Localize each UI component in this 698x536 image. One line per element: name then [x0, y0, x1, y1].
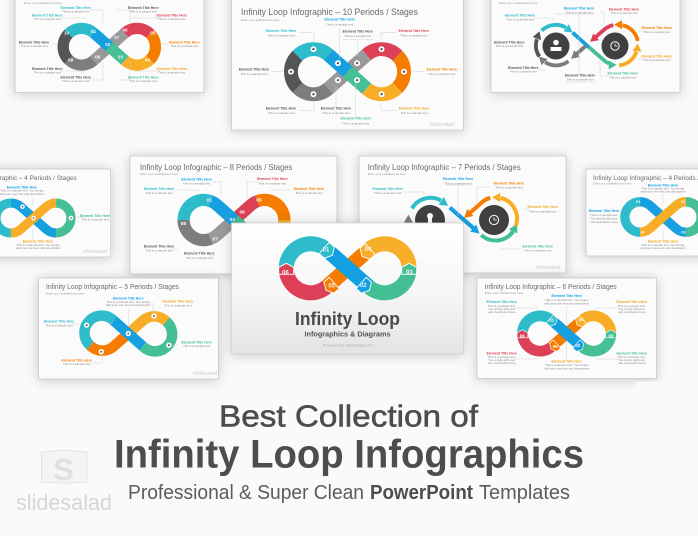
logo: slidesalad: slidesalad	[16, 490, 112, 515]
element labels: This is a sample text.	[618, 355, 646, 359]
icon: person badge	[415, 205, 445, 235]
infinity loop: 10 numbered segments: 07	[114, 35, 120, 40]
element labels: This is a sample text	[186, 256, 213, 260]
element labels: This is a sample text	[240, 72, 268, 76]
infinity loop: 8 segments	[181, 198, 284, 243]
slide subtitle: Enter your subtitled text here	[241, 18, 280, 22]
element labels: add your own text and description	[106, 303, 151, 307]
element labels	[144, 177, 324, 260]
element labels: Element Title Here	[128, 6, 159, 10]
element labels: Element Title Here	[565, 74, 595, 78]
element labels	[0, 186, 110, 250]
infinity loop: 10 numbered segments	[63, 28, 156, 65]
heading: infinity loop infographics: Infinity Loop Infographics	[114, 432, 584, 476]
badge 03: 03	[406, 270, 413, 276]
element labels: Element Title Here	[551, 294, 582, 298]
element labels: Element Title Here	[616, 351, 647, 355]
main slide heading: Infinity Loop	[295, 309, 400, 329]
panel: main cover slide	[232, 223, 464, 354]
element labels: You simply add your	[488, 358, 515, 362]
element labels: Element Title Here	[443, 177, 473, 181]
panel: 6 periods slide	[477, 278, 656, 378]
infinity loop: 10 numbered segments: 05	[150, 31, 156, 36]
element labels: Element Title Here	[181, 178, 212, 182]
slide title: Infinity Loop Infographic – 5 Periods / Stages	[46, 284, 179, 291]
subheading: Professional & Super Clean	[128, 482, 364, 504]
infinity loop: 6 numbered segments: 01	[549, 318, 555, 323]
element labels: This is a sample text	[565, 10, 593, 14]
element labels: Element Title Here	[144, 187, 174, 191]
element labels: This is a sample text	[164, 303, 192, 307]
element labels: This is a sample text	[374, 191, 402, 195]
element labels: This is a sample text	[428, 72, 456, 76]
element labels: Element Title Here	[564, 7, 594, 11]
element labels: This is a sample text. You simply	[107, 300, 150, 304]
element labels	[239, 18, 457, 125]
element labels: own description here	[488, 361, 516, 365]
subheading: PowerPoint	[370, 482, 473, 504]
element labels: Element Title Here	[551, 360, 582, 364]
element labels	[19, 6, 200, 83]
element labels	[372, 177, 558, 253]
element labels: Element Title Here	[641, 54, 672, 58]
element labels: This is a sample text	[171, 44, 198, 48]
element labels: This is a sample text	[524, 249, 552, 253]
element labels: own description here	[618, 361, 646, 365]
infinity loop: 8 segments: 05	[256, 198, 262, 204]
element labels: This is a sample text	[529, 210, 557, 214]
element labels: Element Title Here	[19, 40, 49, 44]
element labels: This is a sample text.	[488, 355, 516, 359]
element labels: This is a sample text. You simply	[16, 243, 60, 247]
element labels: Element Title Here	[648, 240, 678, 244]
element labels: This is a sample text	[643, 58, 671, 62]
element labels: This is a sample text	[610, 11, 638, 15]
infinity loop: 4 numbered segments	[625, 200, 698, 235]
element labels: Element Title Here	[342, 30, 373, 34]
watermark: slidesalad	[430, 122, 454, 128]
infinity loop: 10 numbered segments: 09	[68, 58, 74, 63]
slide subtitle: Enter your subtitled text here	[46, 291, 85, 295]
element labels: Element Title Here	[163, 300, 193, 304]
logo: slidesalad	[16, 450, 112, 515]
element labels: Element Title Here	[607, 72, 638, 76]
element labels: This is a sample text	[510, 70, 537, 74]
infinity loop: 4 numbered segments: 01	[636, 200, 640, 204]
logo: slidesalad: S	[53, 452, 74, 487]
slide title: Infinity Loop Infographic – 6 Periods / Stages	[485, 284, 617, 291]
element labels: You simply add your	[618, 307, 645, 311]
element labels: This is a sample text	[344, 34, 372, 38]
infinity loop: 8 segments: 06	[239, 209, 245, 215]
infinity loop: 10 numbered segments: 06	[123, 28, 128, 33]
element labels: Element Title Here	[60, 75, 91, 79]
element labels: Element Title Here	[169, 40, 200, 44]
element labels: This is a sample text	[62, 9, 90, 13]
element labels: This is a sample text	[34, 71, 61, 75]
element labels: Element Title Here	[61, 358, 92, 362]
infinity loop: 8 segments: 01	[207, 198, 212, 204]
element labels: This is a sample text	[496, 44, 523, 48]
infinity loop: 6 numbered segments: 06	[520, 334, 525, 339]
element labels: Element Title Here	[399, 106, 429, 110]
element labels: This is a sample text	[34, 17, 61, 21]
element labels: Element Title Here	[321, 106, 351, 110]
element labels: This is a sample text. You simply	[545, 298, 589, 302]
element labels: Element Title Here	[156, 13, 187, 17]
element labels: add your own text and description	[0, 192, 45, 196]
element labels: This is a sample text	[63, 362, 91, 366]
element labels: You simply add your	[618, 358, 645, 362]
element labels: Element Title Here	[508, 66, 539, 70]
element labels	[589, 184, 686, 250]
element labels: Element Title Here	[266, 29, 296, 33]
slide subtitle: Enter your subtitled text here	[140, 172, 179, 176]
element labels: This is a sample text. You simply	[0, 188, 44, 192]
slide title: Infinity Loop Infographic – 7 Periods / Stages	[368, 163, 521, 172]
infinity loop: 10 numbered segments: 02	[105, 42, 111, 47]
panel: 5 periods slide	[38, 278, 218, 379]
element labels: Element Title Here	[23, 240, 53, 244]
infinity loop: 10 numbered segments: 08	[95, 55, 101, 60]
element labels: You simply add your	[591, 216, 617, 220]
element labels: Element Title Here	[239, 68, 269, 72]
infinity loop: 10 numbered segments: 10	[64, 31, 70, 36]
infinity loop: 8 segments: 07	[212, 237, 218, 243]
panel: 4 periods slide right	[586, 169, 698, 256]
element labels: Element Title Here	[340, 117, 371, 121]
infinity loop: 6 numbered segments: 03	[609, 334, 614, 339]
element labels: own description here	[488, 310, 516, 314]
slide title: Infinity Loop Infographic – 10 Periods / Stages	[241, 7, 418, 17]
panel: 4 periods slide left	[0, 169, 111, 257]
element labels: This is a sample text	[183, 344, 211, 348]
element labels: This is a sample text	[326, 22, 354, 26]
element labels: This is a sample text	[267, 111, 295, 115]
element labels: This is a sample text	[643, 30, 671, 34]
element labels: This is a sample text	[62, 79, 90, 83]
slide title: Infinity Loop Infographic – 8 Periods / Stages	[140, 163, 292, 172]
panel: arrows loop slide top right	[491, 0, 680, 92]
element labels: Element Title Here	[184, 252, 215, 256]
infinity arrows	[404, 193, 520, 241]
element labels: own description here	[590, 220, 618, 224]
slide subtitle: Enter your subtitled text here	[485, 291, 523, 295]
element labels: This is a sample text	[400, 111, 428, 115]
badge 01: 01	[323, 247, 330, 253]
icon: person badge	[542, 32, 570, 60]
icon: clock badge	[602, 32, 628, 60]
panel: 10 periods slide	[232, 0, 464, 130]
element labels: Element Title Here	[80, 214, 110, 218]
watermark: slidesalad	[536, 265, 560, 271]
slide subtitle: Enter your subtitled text here	[593, 182, 632, 186]
infinity loop: 6 numbered segments: 04	[579, 317, 584, 322]
element labels: Element Title Here	[32, 13, 63, 17]
infinity loop: 4 numbered segments: 04	[640, 231, 646, 235]
element labels: Element Title Here	[128, 75, 159, 79]
element labels: Element Title Here	[505, 14, 535, 18]
element labels: Element Title Here	[609, 8, 639, 12]
element labels: This is a sample text	[130, 79, 157, 83]
panel: 8 periods slide	[130, 156, 337, 274]
element labels: This is a sample text.	[590, 213, 618, 217]
element labels: Element Title Here	[616, 300, 647, 304]
element labels: This is a sample text.	[618, 304, 646, 308]
infinity loop: 10 segments	[288, 46, 407, 97]
panel: 10 stages numbered slide	[15, 0, 204, 92]
element labels: own description here	[618, 310, 646, 314]
infinity loop: 8 segments: 02	[230, 217, 235, 223]
infinity loop: 5 segments	[84, 313, 172, 354]
element labels	[486, 294, 647, 370]
icon: clock badge	[479, 205, 509, 235]
element labels: This is a sample text	[609, 76, 637, 80]
element labels	[44, 296, 212, 366]
element labels: Element Title Here	[398, 29, 429, 33]
badge 02: 02	[360, 283, 367, 289]
infinity loop: 8 segments: 08	[181, 221, 186, 227]
infinity loop: 4 segments	[0, 203, 73, 233]
element labels: Element Title Here	[486, 300, 517, 304]
element labels: Element Title Here	[60, 6, 91, 10]
element labels: This is a sample text. You simply	[545, 363, 589, 367]
element labels: This is a sample text	[158, 71, 186, 75]
infinity loop: 4 numbered segments: 02	[681, 200, 685, 204]
element labels: add your own text and description	[544, 366, 589, 370]
element labels: Element Title Here	[257, 177, 288, 181]
infinity loop: 10 numbered segments: 03	[118, 55, 124, 60]
infinity loop: main 6 segments	[279, 242, 417, 296]
element labels: Element Title Here	[648, 184, 678, 188]
infinity loop: 6 numbered segments: 02	[575, 343, 581, 348]
element labels: Element Title Here	[522, 244, 553, 248]
infinity loop: 6 numbered segments: 05	[553, 344, 558, 349]
element labels: Element Title Here	[494, 40, 525, 44]
heading: best collection of: Best Collection of	[219, 399, 478, 434]
subheading: Templates	[479, 482, 570, 504]
element labels: Element Title Here	[527, 205, 558, 209]
watermark: slidesalad	[193, 371, 217, 377]
slide subtitle: Enter your subtitled text here	[499, 1, 538, 5]
powered by line: Powered By SlideSalad.com	[323, 344, 373, 348]
infinity arrows	[533, 21, 641, 69]
element labels: This is a sample text	[259, 182, 286, 186]
panel: 7 periods slide	[359, 156, 566, 273]
slide subtitle: Enter your subtitled text here	[368, 172, 406, 176]
element labels: Element Title Here	[7, 186, 37, 190]
element labels: Element Title Here	[372, 187, 403, 191]
element labels: This is a sample text	[130, 9, 157, 13]
infinity loop: 6 numbered segments	[517, 315, 616, 353]
subheading	[128, 482, 570, 504]
element labels: This is a sample text	[145, 248, 173, 252]
element labels: This is a sample text	[81, 218, 109, 222]
element labels: add your own text and description	[641, 246, 686, 250]
element labels: You simply add your	[488, 307, 515, 311]
element labels: This is a sample text	[295, 191, 323, 195]
slide subtitle: Enter your subtitled text here	[24, 1, 63, 5]
element labels: This is a sample text	[322, 111, 350, 115]
element labels: This is a sample text. You simply	[641, 243, 685, 247]
element labels: This is a sample text. You simply	[641, 186, 685, 190]
element labels: Element Title Here	[32, 67, 63, 71]
element labels: Element Title Here	[181, 340, 212, 344]
infinity loop: 10 numbered segments: 04	[145, 58, 151, 63]
element labels: This is a sample text	[45, 324, 73, 328]
element labels: Element Title Here	[294, 187, 324, 191]
element labels: This is a sample text	[566, 78, 594, 82]
element labels: This is a sample text	[400, 34, 428, 38]
element labels: This is a sample text.	[488, 304, 516, 308]
element labels: This is a sample text	[20, 44, 48, 48]
element labels: This is a sample text	[145, 191, 173, 195]
element labels: This is a sample text	[158, 17, 186, 21]
element labels: This is a sample text	[495, 186, 523, 190]
element labels: Element Title Here	[266, 106, 296, 110]
element labels: Element Title Here	[641, 26, 672, 30]
watermark: slidesalad	[83, 249, 107, 255]
element labels: add your own text and description	[544, 301, 589, 305]
element labels: This is a sample text	[267, 34, 295, 38]
element labels: Element Title Here	[426, 68, 457, 72]
badge 05: 05	[328, 283, 336, 289]
element labels: Element Title Here	[113, 296, 144, 300]
element labels: add your own text and description	[641, 190, 686, 194]
element labels: add your own text and description	[16, 246, 61, 250]
element labels: Element Title Here	[589, 209, 619, 213]
element labels: Element Title Here	[486, 351, 517, 355]
infinity loop: 4 numbered segments: 03	[681, 231, 686, 235]
element labels: Element Title Here	[324, 18, 355, 22]
element labels: Element Title Here	[44, 320, 74, 324]
element labels: This is a sample text	[506, 18, 534, 22]
infinity loop: 10 numbered segments: 01	[91, 29, 97, 34]
badge 04: 04	[365, 247, 372, 253]
element labels: Element Title Here	[144, 244, 174, 248]
element labels: This is a sample text	[444, 182, 472, 186]
badge 06: 06	[282, 270, 289, 276]
element labels	[494, 7, 672, 82]
element labels: Element Title Here	[494, 182, 524, 186]
element labels: Element Title Here	[156, 67, 187, 71]
element labels: This is a sample text	[342, 121, 370, 125]
element labels: This is a sample text	[183, 182, 211, 186]
main slide subheading: Infographics & Diagrams	[304, 330, 390, 339]
